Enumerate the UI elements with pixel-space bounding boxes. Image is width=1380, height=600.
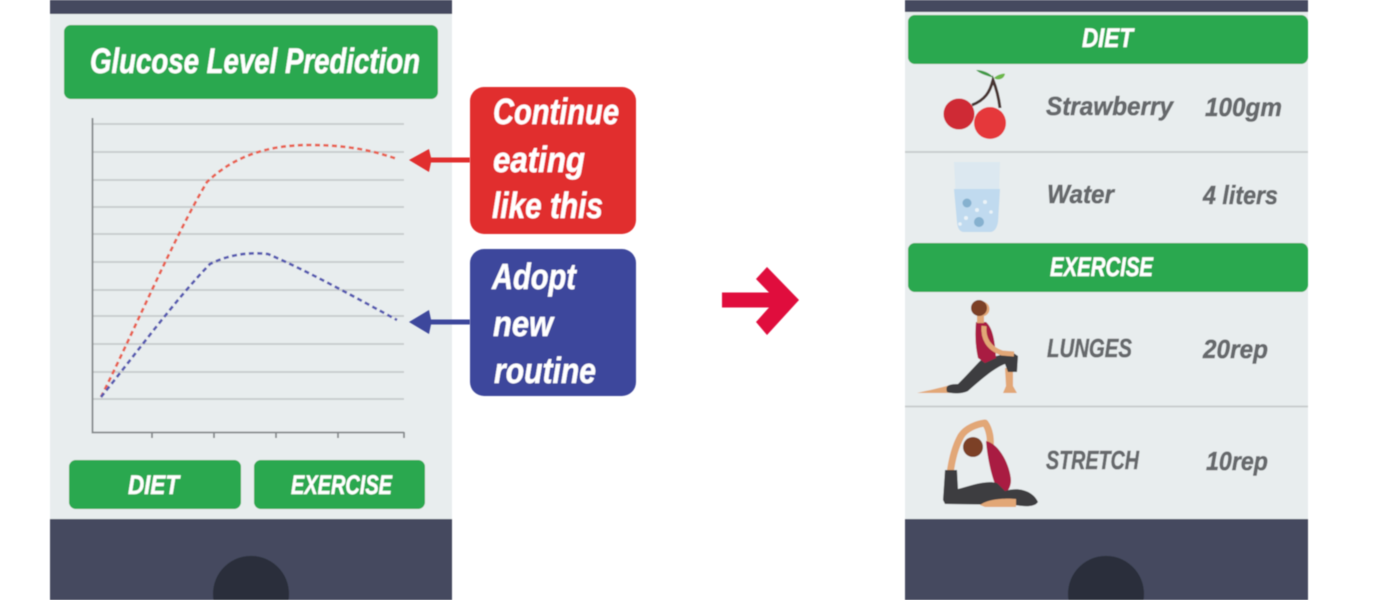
row: water: Water — [1047, 179, 1116, 209]
callout: continue eating — [470, 87, 636, 234]
arrow: red to prediction line — [409, 149, 470, 172]
phone screen right — [905, 10, 1308, 522]
title banner — [64, 25, 438, 99]
callout: adopt new routine — [470, 249, 636, 396]
row: strawberry: 100gm — [1205, 92, 1282, 122]
button: exercise: EXERCISE — [291, 470, 393, 500]
button: exercise — [254, 460, 425, 509]
callout: continue eating: like this — [492, 185, 603, 226]
row: lunges: LUNGES — [1047, 333, 1133, 363]
banner: diet — [908, 15, 1308, 64]
icon: cherries — [944, 70, 1006, 139]
banner: exercise — [908, 243, 1308, 292]
row: lunges — [1047, 333, 1268, 364]
phone: glucose prediction — [50, 0, 452, 600]
home button left — [213, 556, 289, 600]
button: diet: DIET — [128, 470, 181, 500]
row: stretch: 10rep — [1206, 446, 1268, 476]
row: stretch — [1046, 445, 1268, 476]
banner: diet: DIET — [1082, 23, 1135, 53]
row: water — [1047, 179, 1278, 210]
row: strawberry: Strawberry — [1046, 91, 1174, 121]
icon: water glass — [954, 162, 1000, 232]
phone screen left — [50, 12, 452, 522]
callout: continue eating: eating — [493, 139, 585, 180]
phone bottom bar right — [905, 519, 1308, 600]
icon: lunge figure — [917, 300, 1018, 393]
row: stretch: STRETCH — [1046, 445, 1140, 475]
callout: adopt new routine: Adopt — [491, 256, 578, 297]
phone: recommendations — [905, 0, 1308, 600]
arrow: next screen — [722, 267, 799, 335]
arrow: blue to prediction line — [409, 310, 470, 334]
row: lunges: 20rep — [1202, 334, 1268, 364]
phone bottom bar left — [50, 519, 452, 600]
phone top bar right — [905, 0, 1308, 12]
row: strawberry — [1046, 91, 1282, 122]
banner: exercise: EXERCISE — [1050, 252, 1154, 282]
button: diet — [69, 460, 241, 509]
callout: continue eating: Continue — [493, 91, 619, 132]
row: water: 4 liters — [1202, 180, 1278, 210]
callout: adopt new routine: routine — [494, 350, 596, 391]
callout: adopt new routine: new — [493, 303, 555, 344]
red prediction line — [101, 145, 397, 397]
blue prediction line — [101, 253, 397, 397]
home button right — [1068, 556, 1144, 600]
line chart — [92, 118, 404, 438]
phone top bar left — [50, 0, 452, 14]
icon: stretch figure — [943, 423, 1038, 507]
title banner: Glucose Level Prediction — [90, 42, 420, 81]
